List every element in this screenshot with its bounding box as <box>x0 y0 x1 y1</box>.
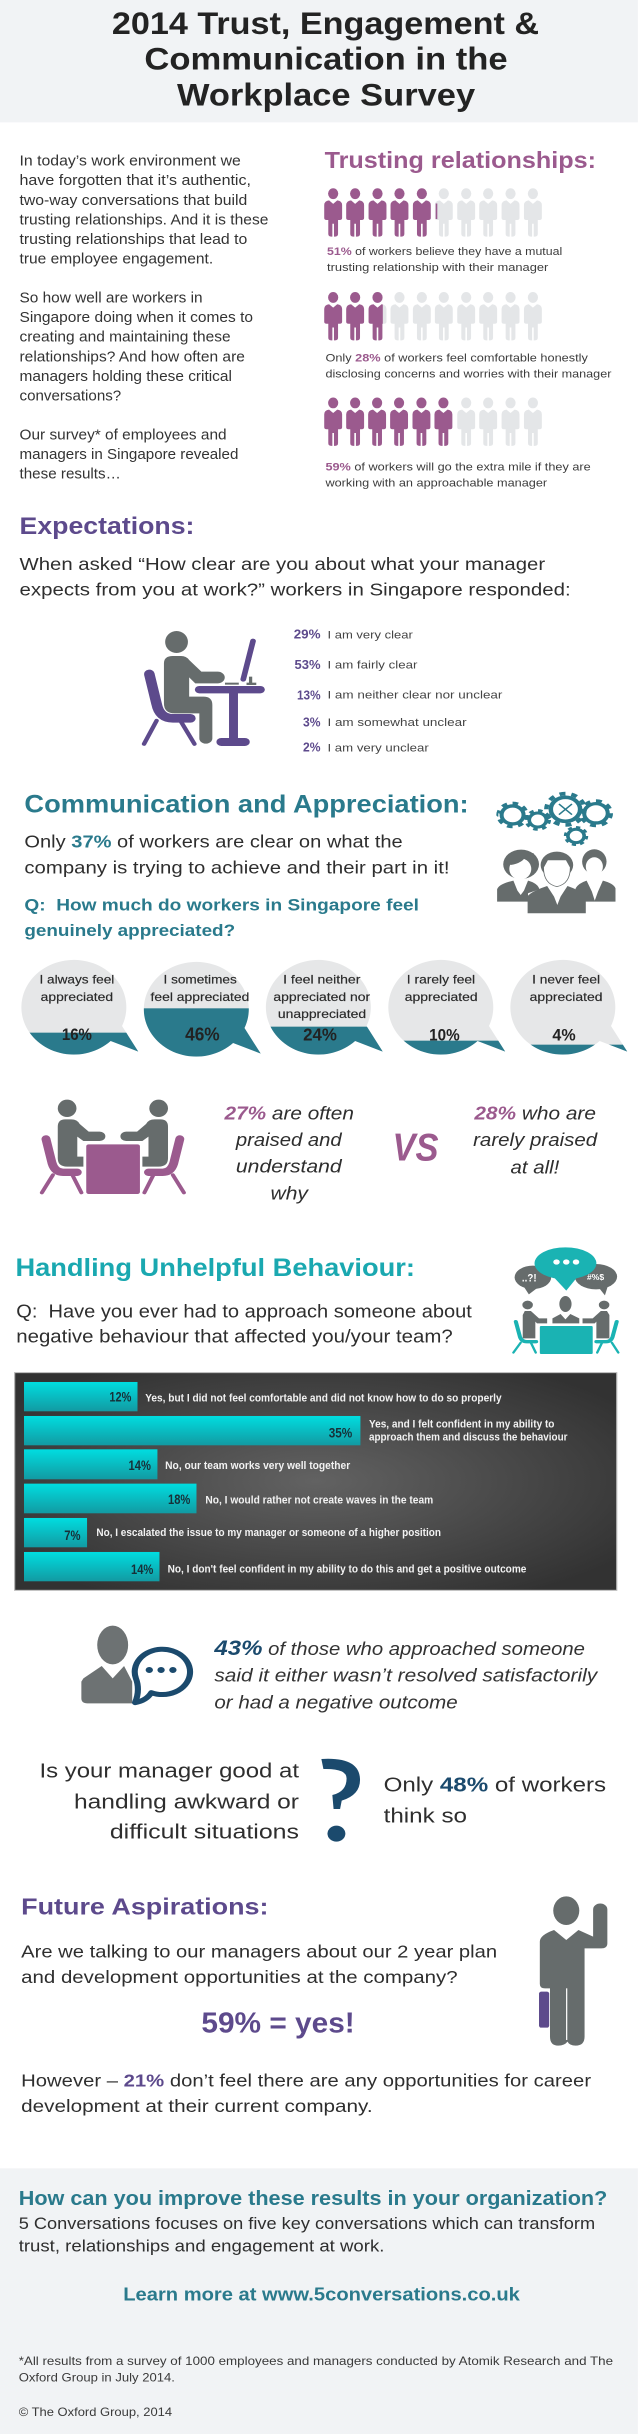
title banner <box>0 0 638 122</box>
bubble: sometimes appreciated <box>143 962 265 1058</box>
text: 43 percent: or had a negative outcome <box>214 1693 458 1713</box>
bubble: always appreciated: appreciated <box>41 990 113 1004</box>
bubble: neither appreciated nor unappreciated: 24% <box>303 1026 337 1045</box>
bubble: always appreciated <box>20 960 142 1056</box>
bar: 14 percent not confident: 14% <box>131 1562 153 1578</box>
text: 28 percent rarely praised: rarely praised <box>473 1130 599 1150</box>
list: clarity results: I am neither clear nor unclear <box>327 689 502 701</box>
bar: 14 percent not confident: No, I don't feel confident in my ability to do this and get a positive outcome <box>168 1563 527 1575</box>
question text: Are we talking to our managers about our 2 year plan <box>21 1943 497 1962</box>
bar chart <box>15 1373 617 1590</box>
bubble: rarely appreciated: I rarely feel <box>407 973 475 986</box>
icon: team discussion: #%$ <box>587 1273 604 1282</box>
bubble: rarely appreciated <box>387 960 509 1057</box>
bubble: sometimes appreciated: feel appreciated <box>151 990 249 1004</box>
text: 27 percent praised: praised and <box>235 1130 343 1150</box>
intro text block <box>20 153 269 482</box>
panel: outcomes <box>39 1626 606 1843</box>
heading: expectations: Expectations: <box>20 512 194 539</box>
bar: 14 percent not confident <box>24 1552 527 1581</box>
text: 48 percent: think so <box>384 1804 467 1827</box>
text: 43 percent: said it either wasn’t resolved satisfactorily <box>214 1666 599 1686</box>
intro text block: these results… <box>20 466 121 482</box>
label: versus: VS <box>393 1126 439 1170</box>
pictogram: 59 percent <box>324 397 542 446</box>
list: clarity results: I am somewhat unclear <box>327 716 467 729</box>
question text: expects from you at work?” workers in Singapore responded: <box>20 581 571 600</box>
text: 43 percent: 43% of those who approached someone <box>213 1636 585 1660</box>
text: 21 percent: development at their current company. <box>21 2098 373 2116</box>
bar: 18 percent <box>24 1484 433 1513</box>
title: Workplace Survey <box>177 77 476 113</box>
bar: 14 percent team works well <box>24 1449 350 1479</box>
bar: 14 percent team works well: No, our team works very well together <box>165 1459 350 1472</box>
bubble: rarely appreciated: appreciated <box>405 990 478 1004</box>
bubble: neither appreciated nor unappreciated <box>265 960 387 1057</box>
text: 27 percent praised: 27% are often <box>224 1103 354 1124</box>
list: clarity results: I am fairly clear <box>327 659 417 671</box>
text: 5 conversations <box>19 2215 595 2255</box>
title: Communication in the <box>144 41 508 77</box>
intro text block: trusting relationships that lead to <box>20 231 247 248</box>
bubble: neither appreciated nor unappreciated: appreciated nor <box>273 990 371 1004</box>
intro text block: Singapore doing when it comes to <box>20 309 253 326</box>
bar: 35 percent <box>24 1416 568 1445</box>
text: 37 percent line 2: company is trying to achieve and their part in it! <box>24 859 450 878</box>
intro text block: managers holding these critical <box>20 368 232 385</box>
list: clarity results: 3% <box>303 716 321 730</box>
question text: negative behaviour that affected you/your team? <box>16 1327 453 1347</box>
list: clarity results: 13% <box>297 689 321 703</box>
panel: expectations <box>20 512 571 755</box>
text: 28 percent rarely praised: 28% who are <box>473 1103 596 1124</box>
footnote: *All results from a survey of 1000 employees and managers conducted by Atomik Research and The <box>19 2354 613 2368</box>
text: 28 percent rarely praised: at all! <box>511 1157 560 1178</box>
icon: gears <box>498 794 611 845</box>
text: manager question: handling awkward or <box>74 1790 300 1813</box>
intro text block: In today’s work environment we <box>20 153 241 169</box>
title <box>112 6 539 113</box>
bar: 7 percent: No, I escalated the issue to my manager or someone of a higher position <box>96 1526 441 1539</box>
title: 2014 Trust, Engagement & <box>112 6 539 41</box>
bar: 12 percent <box>24 1382 502 1411</box>
list: clarity results: 2% <box>303 741 321 755</box>
footnote: Oxford Group in July 2014. <box>19 2371 175 2384</box>
text: 27 percent praised: why <box>271 1183 310 1204</box>
question text <box>16 1302 472 1347</box>
heading: communication and appreciation: Communication and Appreciation: <box>24 789 469 818</box>
bar: 12 percent: 12% <box>109 1390 131 1405</box>
panel: handling unhelpful behaviour <box>15 1247 618 1590</box>
text: manager question: difficult situations <box>110 1820 299 1843</box>
bubble: always appreciated: I always feel <box>39 973 114 986</box>
bar: 7 percent <box>24 1518 441 1547</box>
question heading <box>24 895 419 940</box>
icon: team discussion <box>513 1247 618 1354</box>
bubble: never appreciated <box>509 960 631 1058</box>
caption line: 59 percent: working with an approachable manager <box>324 476 548 489</box>
bar: 35 percent: Yes, and I felt confident in my ability to <box>369 1417 555 1430</box>
bar: 7 percent: 7% <box>64 1528 81 1544</box>
icon: meeting at table <box>42 1100 184 1194</box>
text: 48 percent <box>384 1774 606 1827</box>
text: 5 conversations: 5 Conversations focuses on five key conversations which can transform <box>19 2215 595 2233</box>
intro text block: true employee engagement. <box>20 251 213 267</box>
bar: 12 percent: Yes, but I did not feel comfortable and did not know how to do so properly <box>145 1391 502 1404</box>
intro text block: managers in Singapore revealed <box>20 446 238 463</box>
panel: appreciation speech bubbles <box>20 960 631 1058</box>
call to action: Learn more at www.5conversations.co.uk <box>123 2285 520 2305</box>
text: 21 percent <box>21 2072 592 2116</box>
caption: 59 percent: 59% of workers will go the extra mile if they are <box>325 460 591 473</box>
bar: 18 percent: 18% <box>168 1492 190 1508</box>
text: 43 percent <box>213 1636 599 1713</box>
bubble: neither appreciated nor unappreciated: I feel neither <box>283 973 361 986</box>
intro text block: So how well are workers in <box>20 290 203 306</box>
bar: 14 percent team works well: 14% <box>129 1458 151 1474</box>
panel: praise comparison <box>42 1100 599 1204</box>
intro text block: creating and maintaining these <box>20 329 231 345</box>
panel: trusting relationships <box>324 148 612 489</box>
question text <box>20 556 571 600</box>
list: clarity results: I am very clear <box>327 628 413 641</box>
intro text block: conversations? <box>20 388 121 404</box>
list: clarity results: I am very unclear <box>327 741 429 754</box>
intro text block: trusting relationships. And it is these <box>20 212 269 228</box>
bar: 35 percent: 35% <box>329 1426 352 1441</box>
bubble: never appreciated: 4% <box>552 1025 576 1044</box>
list: clarity results <box>294 628 502 755</box>
bubble: sometimes appreciated: I sometimes <box>164 973 237 986</box>
bubble: sometimes appreciated: 46% <box>185 1025 220 1045</box>
panel: footer <box>0 2168 638 2434</box>
list: clarity results: 53% <box>295 658 321 673</box>
stat: 59 percent yes: 59% = yes! <box>201 2007 355 2039</box>
question text: When asked “How clear are you about what your manager <box>20 556 546 574</box>
bubble: never appreciated: I never feel <box>532 973 600 986</box>
question text: and development opportunities at the company? <box>21 1969 458 1987</box>
intro text block: Our survey* of employees and <box>20 427 227 443</box>
bubble: never appreciated: appreciated <box>530 990 602 1004</box>
heading: handling unhelpful behaviour: Handling Unhelpful Behaviour: <box>15 1253 415 1281</box>
footnote <box>19 2354 613 2384</box>
text: 37 percent: Only 37% of workers are clear on what the <box>24 833 403 852</box>
intro text block: two-way conversations that build <box>20 192 247 208</box>
question text: Q: Have you ever had to approach someone about <box>16 1302 472 1322</box>
pictogram: 51 percent <box>324 188 542 237</box>
caption: 51 percent: 51% of workers believe they have a mutual <box>327 244 562 258</box>
panel: communication and appreciation <box>24 789 615 940</box>
text: manager question <box>39 1760 300 1843</box>
text: 48 percent: Only 48% of workers <box>384 1774 606 1796</box>
copyright: © The Oxford Group, 2014 <box>19 2405 172 2419</box>
bubble: always appreciated: 16% <box>62 1025 92 1044</box>
intro text block: relationships? And how often are <box>20 349 245 365</box>
text: 5 conversations: trust, relationships and engagement at work. <box>19 2237 384 2255</box>
heading: trusting relationships: Trusting relationships: <box>325 148 596 173</box>
list: clarity results: 29% <box>294 628 321 642</box>
icon: question mark <box>321 1759 360 1842</box>
heading: future aspirations: Future Aspirations: <box>21 1893 268 1920</box>
icon: person with briefcase <box>539 1896 607 2046</box>
question text <box>21 1943 497 1987</box>
caption line: 51 percent: trusting relationship with their manager <box>327 260 549 274</box>
caption: 28 percent: Only 28% of workers feel comfortable honestly <box>325 351 588 364</box>
question heading: genuinely appreciated? <box>24 921 235 940</box>
icon: person at desk <box>144 631 260 744</box>
text: 27 percent praised: understand <box>236 1157 343 1177</box>
icon: business people <box>497 849 615 913</box>
icon: person with speech bubble <box>81 1626 190 1703</box>
intro text block: have forgotten that it’s authentic, <box>20 173 251 189</box>
bar: 18 percent: No, I would rather not create waves in the team <box>205 1494 433 1506</box>
text: 21 percent: However – 21% don’t feel there are any opportunities for career <box>21 2072 592 2091</box>
icon: team discussion: ..?! <box>522 1272 537 1284</box>
bubble: rarely appreciated: 10% <box>429 1025 460 1044</box>
panel: future aspirations <box>21 1893 607 2116</box>
pictogram: 28 percent <box>324 292 542 340</box>
bubble: neither appreciated nor unappreciated: unappreciated <box>278 1007 366 1021</box>
text: 28 percent rarely praised <box>473 1103 599 1178</box>
bar: 35 percent: approach them and discuss the behaviour <box>369 1431 568 1443</box>
caption line: 28 percent: disclosing concerns and worries with their manager <box>325 367 612 380</box>
text: 27 percent praised <box>224 1103 354 1204</box>
question heading: Q: How much do workers in Singapore feel <box>24 895 419 914</box>
text: manager question: Is your manager good at <box>39 1760 300 1782</box>
